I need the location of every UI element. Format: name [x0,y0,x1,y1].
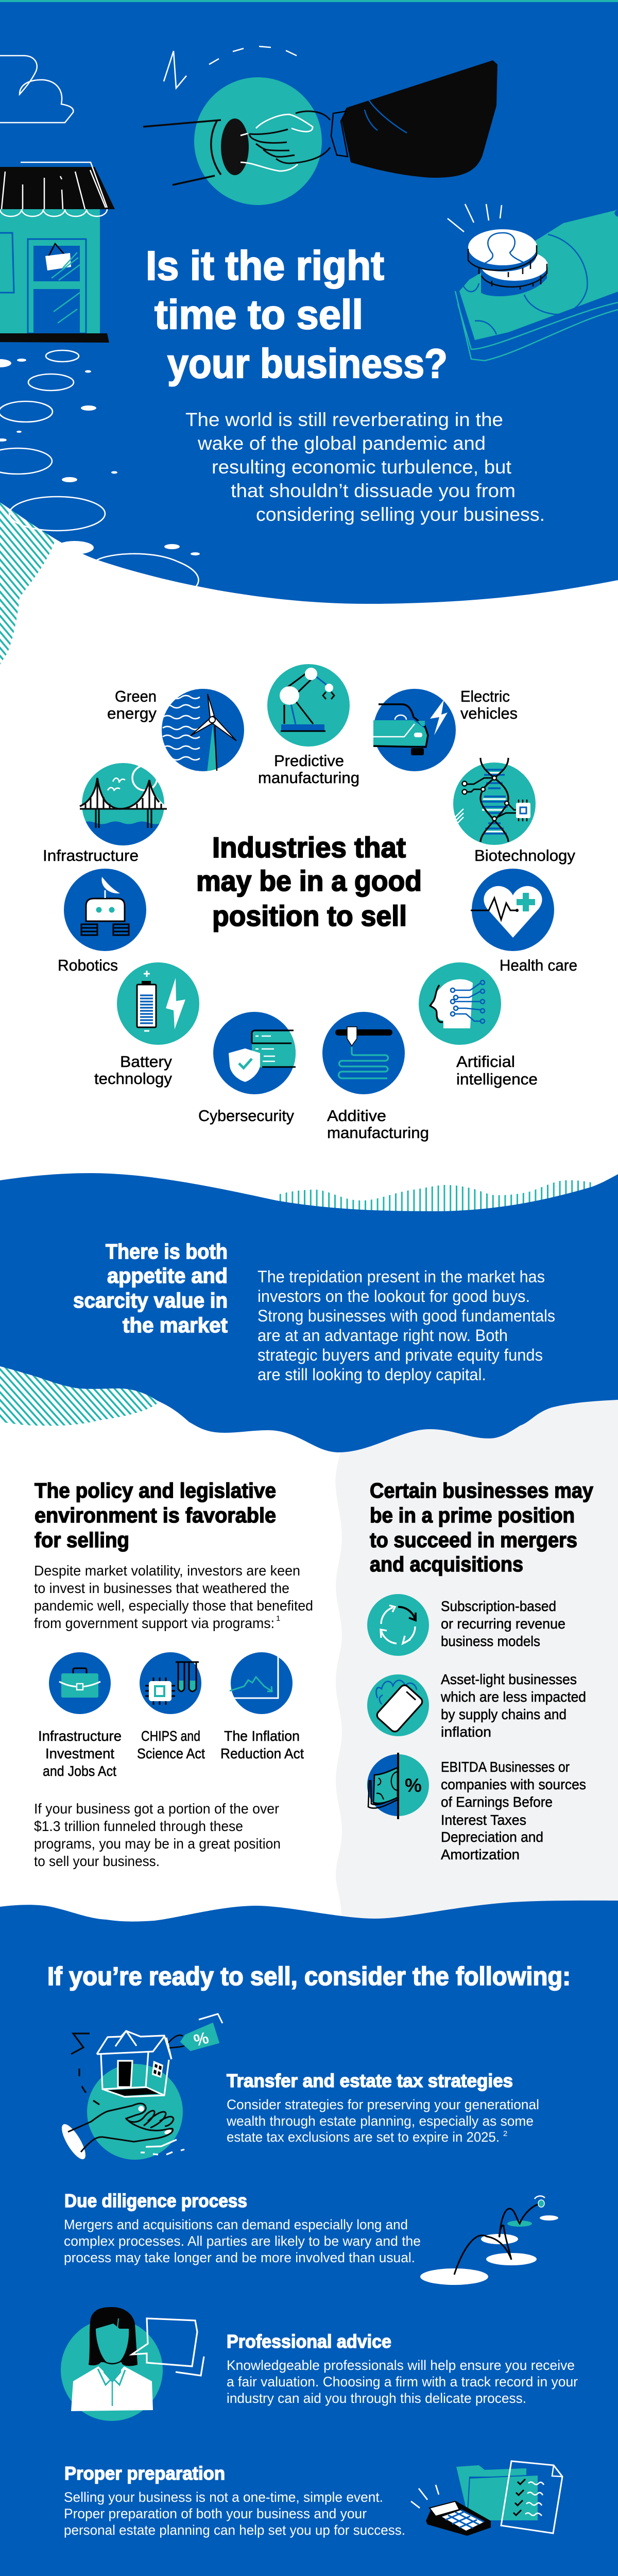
industry: electric vehicles: Electric [460,687,510,705]
item: transfer and estate tax: Transfer and estate tax strategies [227,2070,513,2091]
item: subscription: or recurring revenue [441,1616,565,1632]
body text: policy: to invest in businesses that weathered the [34,1580,289,1596]
decorative stripes above appetite panel [276,1180,591,1216]
body text: policy: from government support via programs: [34,1615,274,1631]
body text: portion: If your business got a portion of the over [34,1801,279,1817]
body text: appetite: Strong businesses with good fundamentals [258,1307,555,1325]
item: transfer and estate tax: Consider strategies for preserving your generational [227,2097,539,2112]
item: professional advice: a fair valuation. Choosing a firm with a track record in your [227,2374,578,2389]
decorative puddles [0,350,200,592]
body text: portion: $1.3 trillion funneled through these [34,1818,243,1834]
industry: green energy: Green [115,687,157,705]
item: ebitda: of Earnings Before [441,1794,553,1810]
body text: portion: programs, you may be in a great position [34,1836,281,1852]
heading: prime position [370,1479,593,1576]
intro text: considering selling your business. [256,504,545,525]
ready panel background [0,1901,618,2576]
item: professional advice: Professional advice [227,2331,391,2352]
item: asset-light [367,1671,586,1740]
item: due diligence: process may take longer and be more involved than usual. [64,2250,415,2265]
item: proper preparation: Proper preparation [64,2463,225,2484]
icon: house in hand: % [192,2028,211,2050]
heading: policy: The policy and legislative [35,1479,276,1502]
industry: battery technology: Battery [120,1053,173,1071]
body text: appetite: are still looking to deploy capital. [258,1365,486,1384]
item: professional advice: industry can aid you through this delicate process. [227,2391,526,2406]
heading: prime position: be in a prime position [370,1503,575,1527]
item: asset-light: by supply chains and [441,1706,566,1722]
item: asset-light: inflation [441,1724,491,1740]
act: chips and science: CHIPS and [141,1728,200,1744]
industry: predictive manufacturing: manufacturing [258,769,359,787]
industry: biotechnology: Biotechnology [474,846,576,865]
decorative striped blob: hero [0,495,57,665]
item: proper preparation: Proper preparation of both your business and your [64,2506,367,2521]
heading: prime position: and acquisitions [370,1552,523,1576]
body text: portion [34,1801,281,1869]
icon: bouncing ball [420,2196,558,2285]
act: chips and science [137,1652,205,1761]
act: chips and science: Science Act [137,1745,205,1761]
heading: appetite and scarcity: scarcity value in [73,1289,228,1312]
item: ebitda: EBITDA Businesses or [441,1759,570,1775]
industry: predictive manufacturing: Predictive [274,752,344,770]
industry: electric vehicles: vehicles [460,704,518,722]
body text: portion: to sell your business. [34,1853,160,1869]
industry: robotics: Robotics [58,956,118,974]
icon: professional advisor [61,2307,204,2421]
panel: ready to sell [0,1901,618,2576]
item: transfer and estate tax: estate tax exclusions are set to expire in 2025. [227,2129,500,2145]
item: due diligence [64,2190,421,2265]
body text: appetite: strategic buyers and private equity funds [258,1346,543,1364]
industry: cybersecurity [198,1012,296,1125]
intro text: wake of the global pandemic and [197,433,486,454]
panel: hero [0,0,618,604]
intro text: that shouldn’t dissuade you from [231,480,516,501]
body text: appetite [258,1267,555,1384]
industry: health care [471,869,577,974]
panel: policy and legislative [34,1479,313,1869]
industry: battery technology: technology [94,1070,172,1088]
panel: appetite and scarcity value [0,1173,618,1452]
item: proper preparation [64,2463,405,2538]
icon: cloud [0,56,73,123]
item: transfer and estate tax [226,2070,539,2145]
body text: policy: Despite market volatility, investors are keen [34,1563,300,1579]
icon: storefront [0,162,115,343]
industry: battery technology [94,962,199,1088]
act: inflation reduction: The Inflation [224,1728,300,1744]
heading: prime position: to succeed in mergers [370,1528,577,1552]
item: subscription: Subscription-based [441,1598,556,1614]
item: professional advice [227,2331,578,2406]
industry: additive manufacturing [322,1012,429,1142]
industry: cybersecurity: Cybersecurity [198,1107,294,1125]
heading: policy: environment is favorable [35,1503,276,1527]
decorative grey panel background [335,1391,618,1922]
intro text: resulting economic turbulence, but [212,456,512,478]
industry: artificial intelligence: Artificial [456,1053,515,1071]
heading: policy: for selling [35,1528,129,1552]
panel: industries [43,664,577,1142]
decorative stripes below appetite panel [0,1360,160,1426]
intro text [185,409,545,525]
industry: infrastructure: Infrastructure [43,846,139,865]
item: transfer and estate tax: 2 [503,2129,507,2138]
panel: prime position [367,1479,593,1862]
heading: ready to sell: If you’re ready to sell, consider the following: [47,1962,571,1991]
icon: folder and calculator [411,2461,562,2536]
heading: industries: position to sell [212,900,407,932]
body text: appetite: are at an advantage right now. Both [258,1326,508,1345]
title [146,243,448,386]
industry: green energy [107,687,244,772]
industry: artificial intelligence [419,962,538,1088]
industry: additive manufacturing: Additive [327,1107,386,1125]
industry: artificial intelligence: intelligence [456,1070,538,1088]
act: infrastructure investment: and Jobs Act [43,1763,116,1779]
industry: robotics [58,869,146,974]
heading: industries: may be in a good [196,865,422,897]
item: subscription: business models [441,1633,540,1649]
heading: policy [35,1479,276,1552]
industry: infrastructure [43,763,167,865]
heading: prime position: Certain businesses may [370,1479,593,1502]
heading: appetite and scarcity: appetite and [107,1264,228,1287]
act: infrastructure investment: Investment [45,1745,114,1761]
heading: industries [196,831,422,932]
intro text: The world is still reverberating in the [185,409,503,430]
icon: house in hand [58,2014,222,2162]
appetite panel background [0,1173,618,1452]
act: inflation reduction [220,1652,304,1761]
industry: green energy: energy [107,704,157,722]
item: due diligence: complex processes. All parties are likely to be wary and the [64,2233,421,2249]
body text: appetite: The trepidation present in the market has [258,1267,545,1286]
item: ebitda: companies with sources [441,1776,586,1792]
heading: appetite and scarcity: the market [123,1313,228,1337]
heading: industries: Industries that [212,831,406,863]
item: ebitda: Interest Taxes [441,1812,526,1828]
item: due diligence: Due diligence process [64,2190,247,2211]
icon: handshake [143,60,497,205]
item: ebitda: % [405,1775,422,1796]
industry: biotechnology [453,758,576,865]
item: professional advice: Knowledgeable professionals will help ensure you receive [227,2358,575,2373]
item: transfer and estate tax: wealth through estate planning, especially as some [226,2113,534,2129]
body text: appetite: investors on the lookout for good buys. [258,1287,530,1306]
industry: electric vehicles [373,687,518,771]
body text: policy: 1 [276,1614,280,1623]
act: infrastructure investment: Infrastructure [38,1728,122,1744]
heading: appetite and scarcity: There is both [106,1240,228,1263]
act: inflation reduction: Reduction Act [220,1745,304,1761]
item: proper preparation: personal estate planning can help set you up for success. [64,2522,405,2538]
icon: money and coins [448,204,618,361]
item: proper preparation: Selling your business is not a one-time, simple event. [64,2489,383,2505]
decorative motion marks [164,46,297,88]
title: Is it the right [146,243,384,289]
item: asset-light: which are less impacted [440,1689,586,1705]
industry: additive manufacturing: manufacturing [327,1124,429,1142]
title: your business? [167,341,448,386]
industry: predictive manufacturing [258,664,359,787]
act: infrastructure investment [38,1652,122,1779]
hero background [0,0,618,604]
item: subscription [367,1594,565,1656]
heading: appetite and scarcity [73,1240,228,1337]
body text: policy: pandemic well, especially those that benefited [34,1598,313,1614]
item: ebitda: Amortization [441,1846,520,1862]
item: ebitda [367,1753,586,1862]
industry: health care: Health care [500,956,577,974]
item: due diligence: Mergers and acquisitions can demand especially long and [64,2217,408,2232]
title: time to sell [154,292,363,337]
item: asset-light: Asset-light businesses [441,1671,577,1687]
item: ebitda: Depreciation and [441,1829,543,1845]
body text: policy [34,1563,313,1631]
